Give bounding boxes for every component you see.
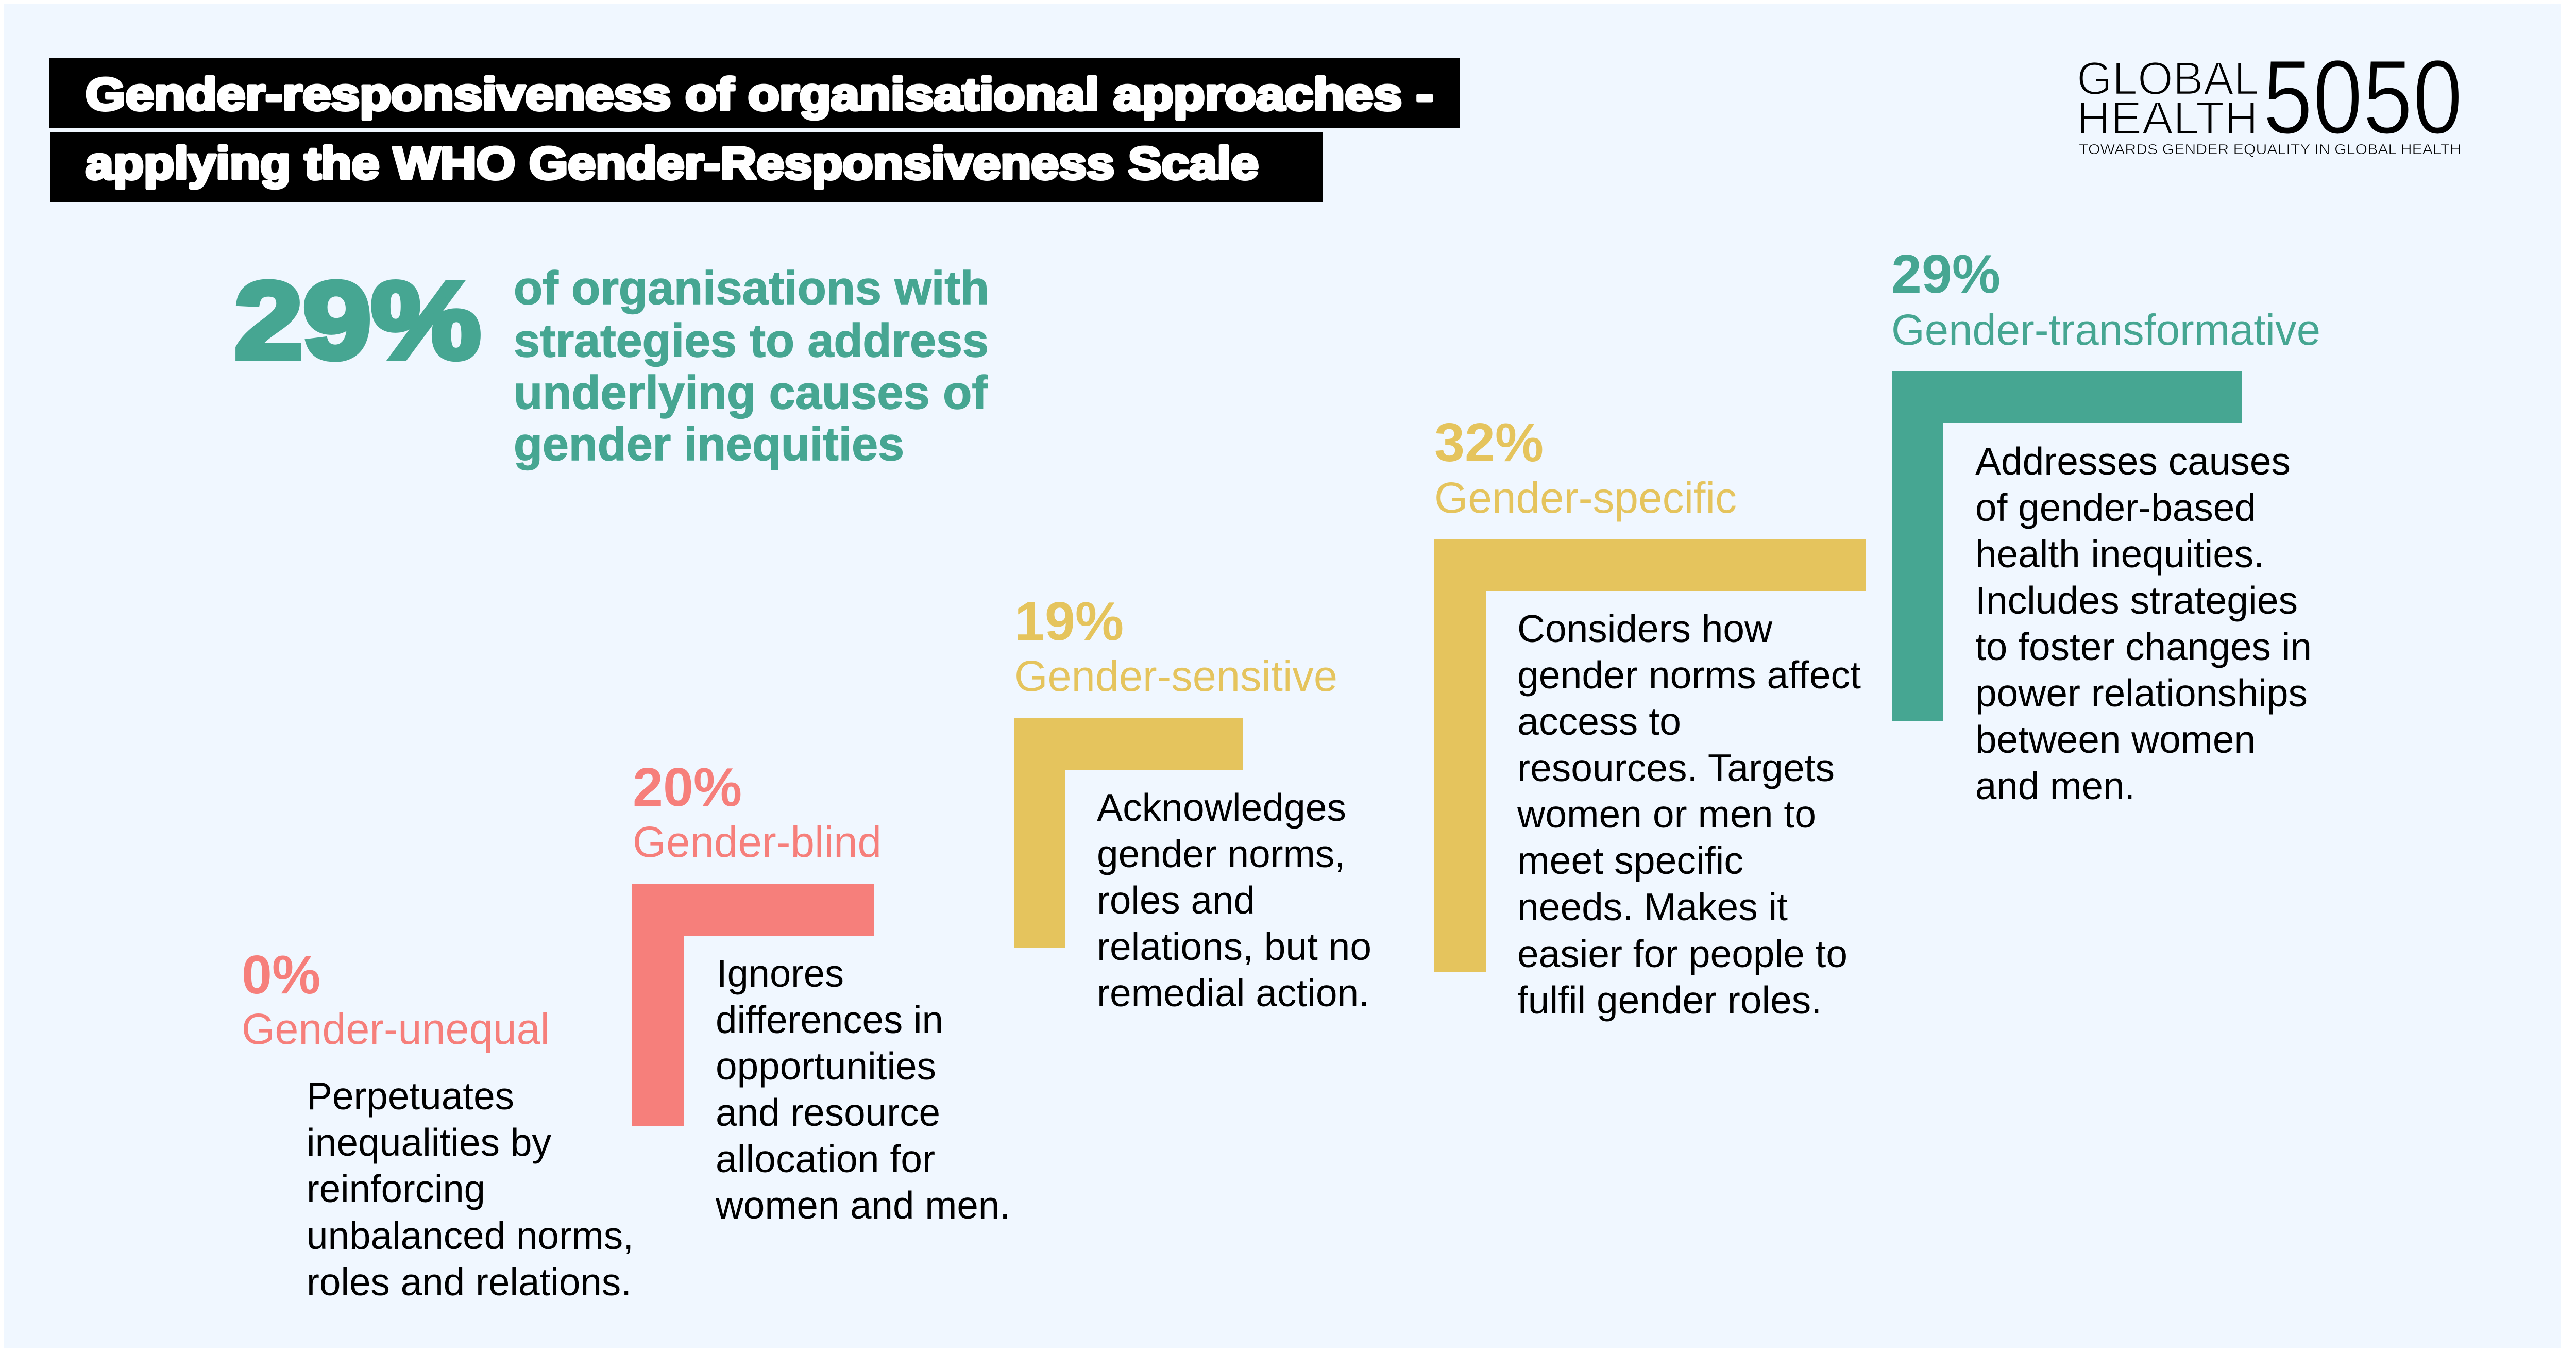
headline statistic: 29%: 29% — [234, 259, 481, 381]
step: gender-sensitive: remedial action. — [1097, 971, 1369, 1015]
step: gender-transformative: Includes strategies — [1975, 579, 2298, 622]
step: gender-specific: Considers how — [1517, 607, 1773, 650]
step: gender-sensitive — [1014, 591, 1371, 1015]
step: gender-unequal: roles and relations. — [307, 1260, 632, 1304]
title — [49, 58, 1460, 202]
logo: Global Health 50/50: GLOBAL — [2077, 53, 2259, 105]
step: gender-specific — [1434, 412, 1866, 1022]
step: gender-sensitive: roles and — [1097, 878, 1255, 922]
logo: Global Health 50/50: HEALTH — [2077, 93, 2258, 144]
step: gender-specific: Gender-specific — [1434, 474, 1737, 522]
step: gender-unequal: inequalities by — [307, 1121, 551, 1164]
logo: Global Health 50/50: 5050 — [2263, 38, 2463, 156]
step: gender-unequal: Perpetuates — [307, 1074, 514, 1118]
step: gender-transformative: and men. — [1975, 764, 2135, 807]
step: gender-transformative: to foster changes in — [1975, 625, 2312, 668]
step: gender-specific: gender norms affect — [1517, 653, 1861, 697]
step: gender-unequal: Gender-unequal — [242, 1005, 550, 1053]
step: gender-transformative: Addresses causes — [1975, 440, 2291, 483]
step: gender-unequal: reinforcing — [307, 1167, 485, 1210]
step: gender-transformative: health inequities. — [1975, 532, 2264, 576]
step: gender-transformative: of gender-based — [1975, 486, 2256, 529]
logo: Global Health 50/50 — [2077, 38, 2463, 157]
step: gender-specific: access to — [1517, 700, 1681, 743]
step: gender-transformative: power relationships — [1975, 671, 2308, 715]
step: gender-specific: needs. Makes it — [1517, 885, 1788, 928]
headline statistic: 29%: gender inequities — [514, 418, 904, 470]
step: gender-specific: easier for people to — [1517, 932, 1848, 975]
step: gender-blind: allocation for — [716, 1137, 935, 1180]
logo: Global Health 50/50: TOWARDS GENDER EQUALITY IN GLOBAL HEALTH — [2079, 141, 2461, 157]
headline statistic: 29%: strategies to address — [514, 315, 989, 367]
step: gender-unequal — [242, 944, 634, 1304]
step: gender-sensitive: Acknowledges — [1097, 786, 1346, 829]
step: gender-blind — [632, 757, 1010, 1227]
step: gender-specific: resources. Targets — [1517, 746, 1835, 789]
step: gender-specific: meet specific — [1517, 839, 1743, 882]
title: Gender-responsiveness of organisational approaches - — [86, 69, 1433, 120]
step: gender-sensitive: gender norms, — [1097, 832, 1345, 875]
step: gender-blind: 20% — [633, 757, 742, 818]
headline statistic: 29%: underlying causes of — [514, 367, 988, 419]
step: gender-transformative: 29% — [1891, 244, 2001, 305]
step: gender-unequal: 0% — [242, 944, 320, 1005]
title: applying the WHO Gender-Responsiveness Scale — [86, 138, 1259, 189]
step: gender-specific: fulfil gender roles. — [1517, 978, 1822, 1022]
headline statistic: 29%: of organisations with — [514, 262, 989, 314]
step: gender-blind: and resource — [716, 1091, 940, 1134]
step: gender-unequal: unbalanced norms, — [307, 1214, 634, 1257]
headline statistic: 29% — [234, 259, 989, 470]
step: gender-blind: Gender-blind — [633, 818, 882, 866]
step: gender-sensitive: 19% — [1014, 591, 1124, 652]
step: gender-transformative — [1891, 244, 2320, 807]
step: gender-blind: women and men. — [715, 1184, 1010, 1227]
step: gender-specific: 32% — [1434, 412, 1544, 473]
step: gender-sensitive: Gender-sensitive — [1014, 652, 1337, 700]
step: gender-sensitive: relations, but no — [1097, 925, 1371, 968]
step: gender-blind: differences in — [716, 998, 943, 1041]
step: gender-specific: women or men to — [1517, 792, 1816, 836]
step: gender-transformative: Gender-transformative — [1891, 306, 2320, 354]
step: gender-transformative: between women — [1975, 718, 2256, 761]
step: gender-blind: Ignores — [717, 952, 844, 995]
step: gender-blind: opportunities — [716, 1044, 936, 1088]
